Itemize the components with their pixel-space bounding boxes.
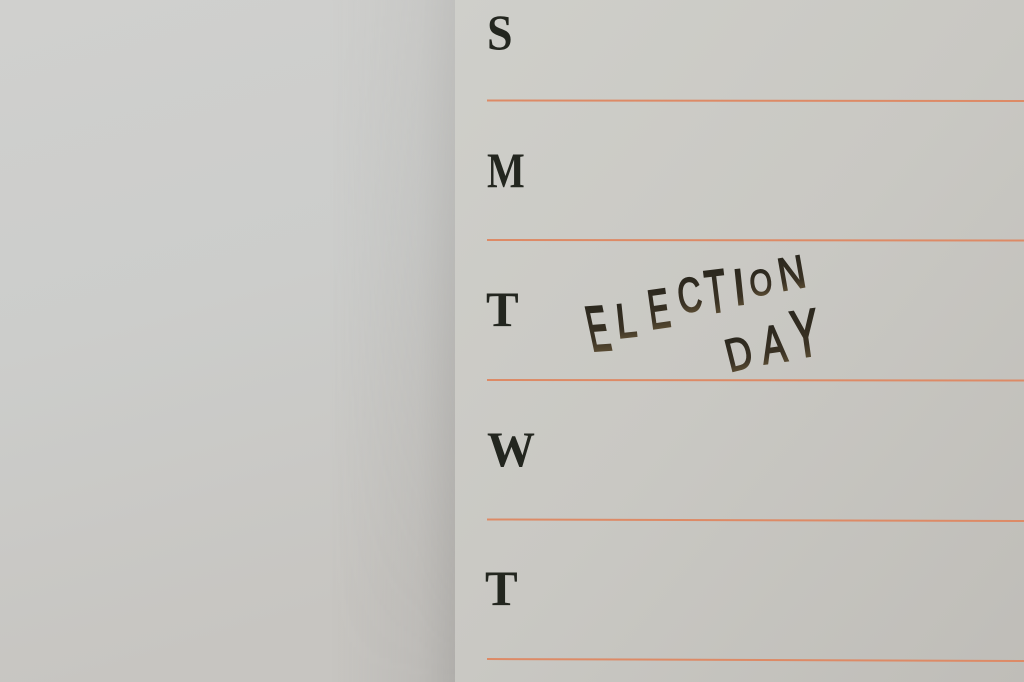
handwriting: ELECTION: T [702, 258, 730, 326]
divider line: Thursday [487, 659, 1024, 661]
panel: right planner page [455, 0, 1024, 682]
handwriting: ELECTION: N [774, 245, 809, 301]
handwriting: DAY: A [757, 313, 790, 375]
handwriting: ELECTION: C [674, 267, 705, 323]
handwriting: DAY: Y [787, 294, 824, 372]
handwriting: ELECTION [580, 245, 809, 365]
day label: Tuesday: T [486, 282, 519, 337]
handwriting: ELECTION: I [730, 259, 748, 317]
handwriting: DAY [720, 294, 824, 382]
divider line: Sunday [487, 100, 1024, 102]
handwriting: ELECTION: O [748, 261, 774, 304]
day label: Wednesday: W [487, 421, 535, 477]
day label: Sunday: S [487, 5, 513, 60]
day label: Thursday: T [485, 561, 518, 616]
handwriting: ELECTION: E [644, 276, 674, 341]
divider line: Monday [487, 239, 1024, 242]
handwritten note: Election Day [580, 245, 824, 382]
handwriting: DAY: D [720, 326, 758, 382]
divider line: Tuesday [487, 379, 1024, 382]
handwriting: ELECTION: E [580, 292, 616, 365]
panel: left blank page [0, 0, 456, 682]
divider line: Wednesday [487, 520, 1024, 521]
handwriting: ELECTION: L [614, 293, 639, 348]
day label: Monday: M [487, 143, 525, 198]
